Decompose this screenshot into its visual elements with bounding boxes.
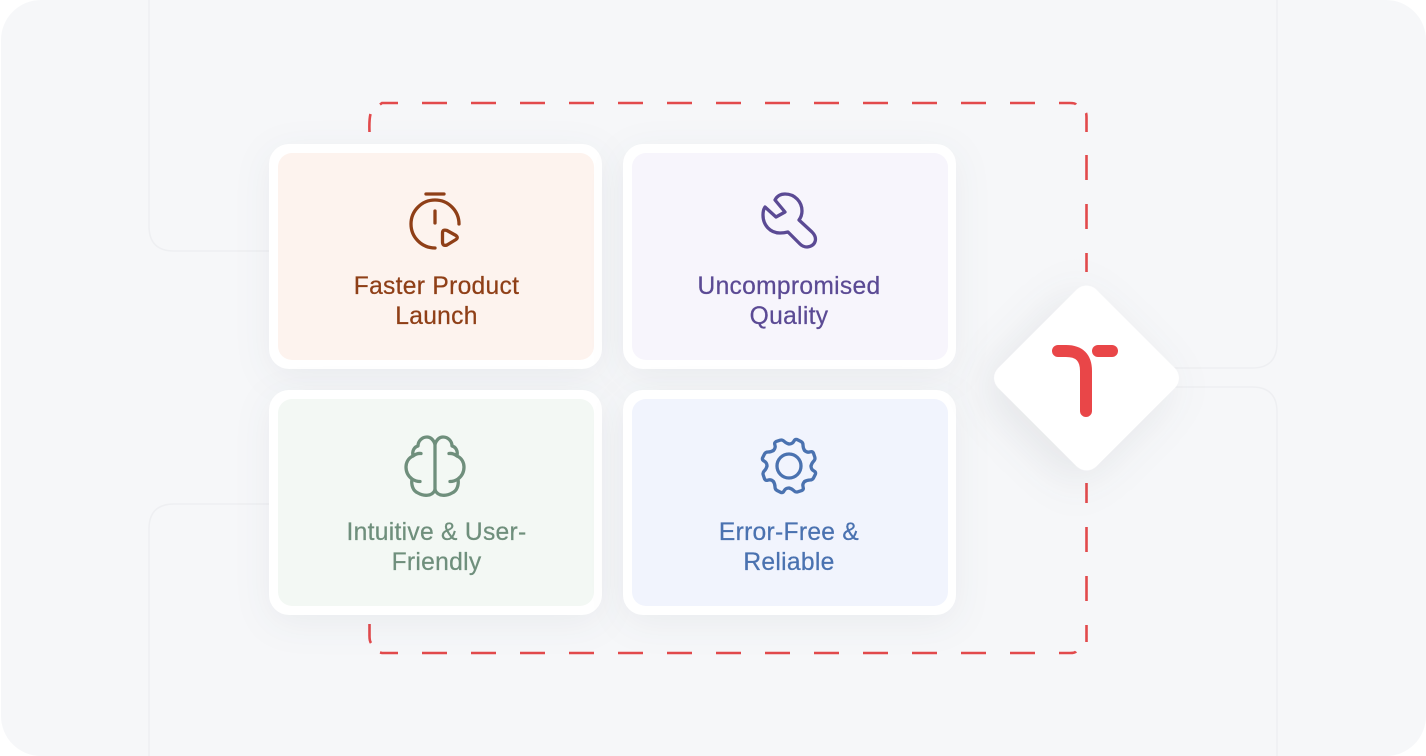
- logo badge: [988, 280, 1185, 476]
- icon: wrench: [763, 194, 815, 247]
- icon: brain: [406, 437, 464, 495]
- label: Error-Free and Reliable: Reliable: [743, 549, 835, 576]
- label: Intuitive and User-Friendly: Intuitive & User-: [346, 519, 527, 546]
- label: Intuitive and User-Friendly: Friendly: [392, 549, 482, 576]
- label: Faster Product Launch: Faster Product: [354, 273, 519, 300]
- background outline frames: [149, 0, 1277, 756]
- card: Faster Product Launch: [269, 144, 602, 369]
- dashed red frame: [369, 103, 1086, 653]
- card: Error-Free and Reliable: [623, 390, 956, 615]
- icon: T logo: [1058, 351, 1112, 411]
- label: Uncompromised Quality: Uncompromised: [698, 273, 880, 300]
- card: Intuitive and User-Friendly: [269, 390, 602, 615]
- card: Uncompromised Quality: [623, 144, 956, 369]
- label: Uncompromised Quality: Quality: [750, 303, 829, 330]
- icon: stopwatch with play: [411, 194, 459, 248]
- icon: gear: [759, 436, 819, 496]
- label: Error-Free and Reliable: Error-Free &: [719, 519, 859, 546]
- label: Faster Product Launch: Launch: [395, 303, 478, 330]
